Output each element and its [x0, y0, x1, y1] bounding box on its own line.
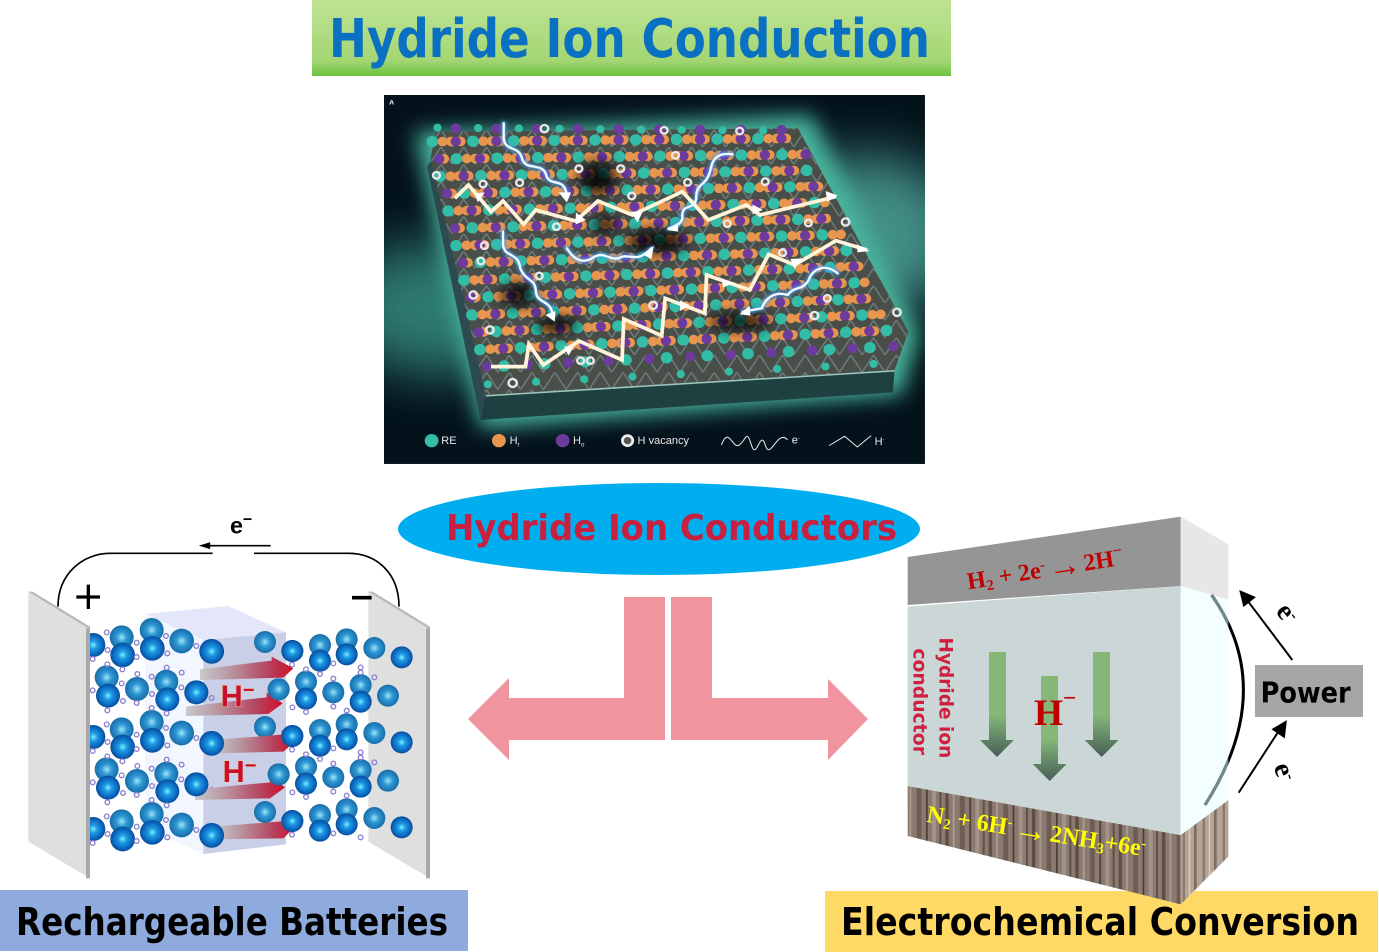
reaction: bottom: 2NH: [1048, 821, 1100, 855]
vacancy shadows: [501, 162, 770, 333]
right electrode: [368, 592, 430, 878]
reaction: bottom: -: [1007, 815, 1014, 831]
panel: lattice illustration: [384, 95, 925, 464]
reaction: top: H: [965, 567, 988, 595]
label: Hydride ion conductor: [908, 637, 955, 758]
top electrode: [908, 517, 1228, 605]
label: Rechargeable Batteries: Rechargeable Batteries: [16, 900, 448, 945]
external circuit arc: [1205, 595, 1243, 805]
background glow: [336, 115, 964, 428]
legend: RE: [441, 435, 457, 447]
atom rows: [432, 128, 904, 384]
spheres and ions: [81, 618, 413, 851]
hydride zigzag paths: [455, 185, 867, 367]
legend: H: [510, 435, 518, 447]
power box: [1255, 665, 1363, 717]
reaction: bottom: →: [1012, 810, 1050, 851]
left electrode: [28, 592, 90, 878]
legend: -: [798, 436, 800, 442]
green arrow: centre: [1033, 676, 1067, 781]
label: e- lower: e: [1267, 758, 1300, 781]
label: Hydride ion conductor: Hydride ion: [934, 637, 955, 758]
reaction: top: -: [1039, 557, 1046, 574]
reaction: bottom: 2: [942, 816, 952, 833]
legend: H vacancy: [638, 435, 690, 447]
label: H- upper: H: [221, 680, 243, 714]
bottom electrode: [908, 786, 1228, 904]
label: H-: H: [1034, 693, 1063, 734]
front spheres: [184, 639, 303, 848]
legend: H: [875, 436, 883, 448]
green arrow: left: [980, 652, 1014, 757]
label: electron: e: [230, 512, 243, 538]
label: H- lower: H: [223, 755, 245, 789]
arrow: right pink: [671, 597, 868, 760]
hydride flow arrows: [186, 657, 295, 839]
panel: battery diagram: [28, 512, 430, 878]
legend: e: [792, 435, 798, 447]
electron wave paths: [503, 123, 838, 317]
panel letter: A: [389, 99, 394, 106]
legend: r: [518, 442, 520, 449]
legend: o: [581, 442, 585, 449]
label: Rechargeable Batteries: [0, 890, 468, 951]
legend: -: [883, 437, 885, 443]
legend: [425, 434, 885, 450]
external wire: [58, 553, 399, 607]
plus sign: [76, 585, 100, 609]
crystal slab: [427, 128, 908, 420]
arrow: electrons out: [1241, 592, 1292, 660]
green arrow: right: [1085, 652, 1119, 757]
reaction: bottom: + 6H: [949, 806, 1009, 840]
label: H-: −: [1063, 686, 1076, 712]
minus sign: [352, 592, 372, 603]
reaction: top: 2: [986, 577, 995, 594]
reaction: bottom: N: [925, 802, 946, 830]
title banner: Hydride Ion Conduction: [329, 7, 930, 70]
label: e- upper: -: [1286, 609, 1302, 623]
conductors ellipse: Hydride Ion Conductors: [446, 508, 897, 549]
arrow: electrons in: [1239, 722, 1286, 793]
panel: electrochemical cell: [908, 517, 1363, 904]
reaction: bottom: 3: [1095, 841, 1105, 858]
reaction: bottom: +6e: [1103, 830, 1143, 861]
arrow: left pink: [468, 597, 665, 760]
reaction: top: −: [1111, 542, 1123, 560]
conductor block: [145, 606, 286, 854]
label: Hydride ion conductor: conductor: [908, 648, 929, 756]
electron arrow: [202, 543, 271, 548]
reaction: bottom: -: [1140, 836, 1148, 852]
vacancy rings: [433, 125, 901, 387]
legend: H: [573, 435, 581, 447]
arrowheads: [474, 191, 870, 356]
label: H- lower: −: [245, 755, 256, 777]
reaction: top: 2H: [1082, 546, 1116, 577]
label: e- lower: -: [1281, 771, 1299, 782]
electrolyte block: [908, 586, 1228, 835]
reaction: top: →: [1045, 545, 1084, 587]
label: H- upper: −: [243, 680, 254, 702]
label: e- upper: e: [1269, 597, 1302, 626]
label: electron: −: [243, 512, 252, 529]
conductors ellipse: [398, 483, 920, 575]
power box: Power: [1261, 675, 1351, 709]
reaction: top: + 2e: [991, 558, 1043, 591]
